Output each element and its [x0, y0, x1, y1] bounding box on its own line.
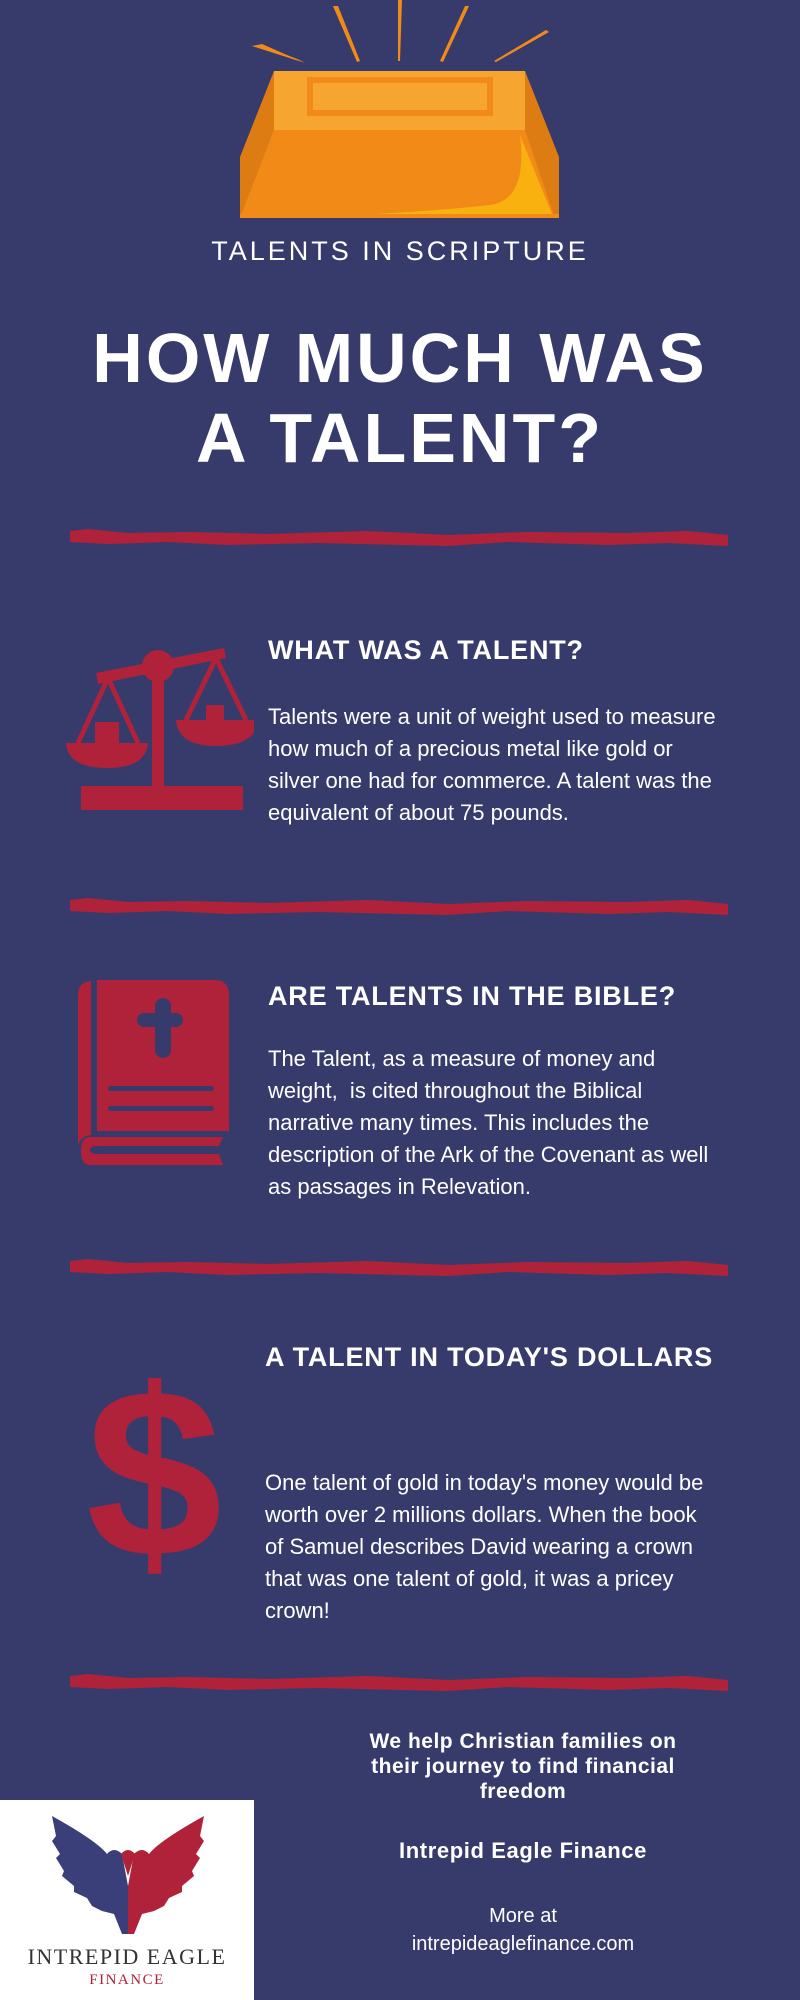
logo text: INTREPID EAGLE [28, 1944, 226, 1969]
text [268, 1046, 708, 1199]
text: how much of a precious metal like gold or [268, 736, 673, 761]
text: Talents were a unit of weight used to measure [268, 704, 716, 729]
text: One talent of gold in today's money would be [265, 1470, 703, 1495]
panel: what was a talent [66, 635, 716, 825]
text: The Talent, as a measure of money and [268, 1046, 655, 1071]
text: that was one talent of gold, it was a pricey [265, 1566, 673, 1591]
tagline: freedom [480, 1780, 566, 1803]
text: of Samuel describes David wearing a crown [265, 1534, 693, 1559]
tagline: We help Christian families on [369, 1730, 676, 1753]
divider [70, 898, 728, 915]
text: worth over 2 millions dollars. When the book [265, 1502, 697, 1527]
divider [70, 1259, 728, 1276]
text: weight, is cited throughout the Biblical [268, 1078, 642, 1103]
text [268, 704, 716, 825]
icon: dollar: $ [86, 1339, 222, 1607]
website [412, 1905, 634, 1955]
tagline: their journey to find financial [371, 1755, 675, 1778]
icon: bible [78, 980, 229, 1165]
logo [0, 1800, 254, 2000]
logo: FINANCE [89, 1972, 165, 1988]
heading: WHAT WAS A TALENT? [268, 635, 584, 665]
text: description of the Ark of the Covenant as well [268, 1142, 708, 1167]
company name: Intrepid Eagle Finance [399, 1838, 647, 1863]
heading: A TALENT IN TODAY'S DOLLARS [265, 1342, 713, 1372]
text: silver one had for commerce. A talent was the [268, 768, 712, 793]
text: crown! [265, 1598, 330, 1623]
panel: are talents in the bible [78, 980, 708, 1199]
website: More at [489, 1905, 557, 1927]
icon: eagle [52, 1816, 204, 1934]
divider [70, 1674, 728, 1691]
text: equivalent of about 75 pounds. [268, 800, 569, 825]
icon: scales [66, 648, 254, 810]
tagline [369, 1730, 676, 1803]
title: A TALENT? [196, 399, 604, 477]
subtitle: TALENTS IN SCRIPTURE [211, 236, 589, 266]
text: as passages in Relevation. [268, 1174, 531, 1199]
text: narrative many times. This includes the [268, 1110, 649, 1135]
website: intrepideaglefinance.com [412, 1933, 634, 1955]
divider [70, 529, 728, 546]
text [265, 1470, 703, 1623]
title [92, 319, 708, 477]
title: HOW MUCH WAS [92, 319, 708, 397]
panel: today's dollars [86, 1339, 713, 1623]
footer text [369, 1730, 676, 1955]
icon: gold bar [240, 0, 559, 218]
heading: ARE TALENTS IN THE BIBLE? [268, 981, 676, 1011]
rays [252, 0, 549, 63]
